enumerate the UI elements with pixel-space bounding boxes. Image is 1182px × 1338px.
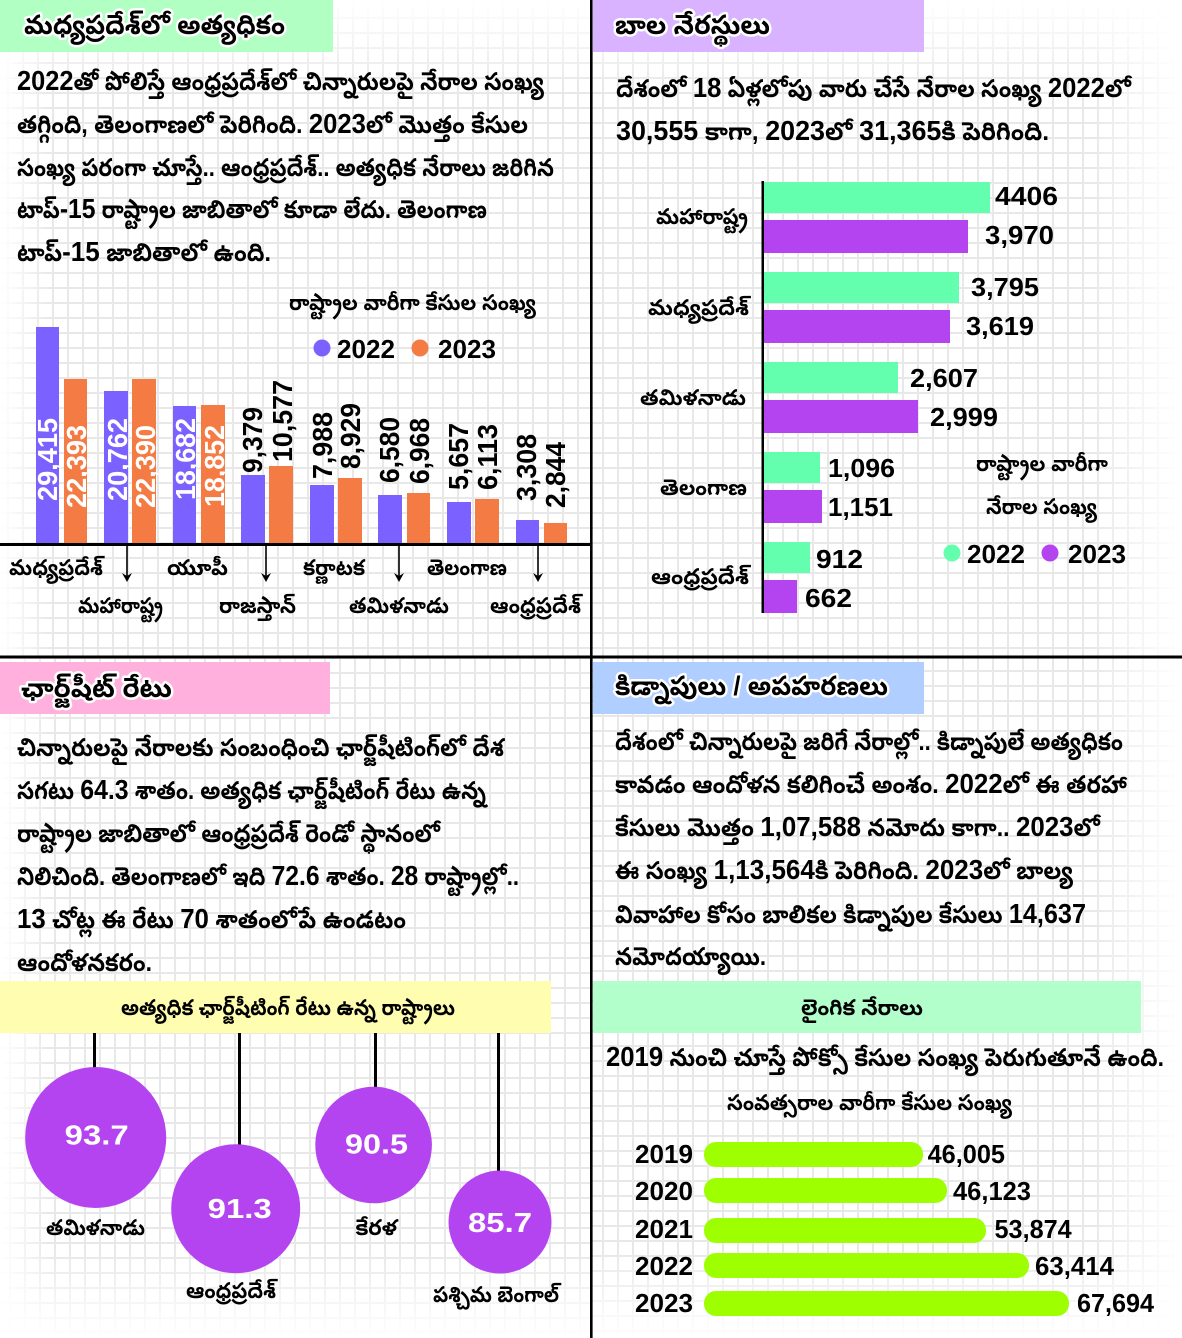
body text: దేశంలో 18 ఏళ్లలోపు వారు చేసే నేరాల సంఖ్య 2022లో: [616, 72, 1132, 108]
group: Tamil Nadu: 2,999: [930, 402, 998, 432]
bar value labels: 22,390: [130, 425, 161, 508]
body text: సగటు 64.3 శాతం. అత్యధిక ఛార్జ్‌షీటింగ్ రేటు ఉన్న: [17, 774, 489, 810]
state labels: యూపీ: [167, 555, 228, 580]
panel: bottom-right kidnappings: [593, 662, 1164, 1318]
legend: 2022 and 2023: 2023: [438, 334, 496, 364]
group: Maharashtra: [656, 181, 1058, 253]
heading band: charge sheet rate: ఛార్జ్‌షీట్ రేటు: [21, 673, 172, 708]
group: Andhra Pradesh: 912: [816, 544, 863, 574]
body text: టాప్-15 జాబితాలో ఉంది.: [17, 236, 271, 267]
row: 2021: 2021: [635, 1214, 693, 1244]
chart note: offences by state: రాష్ట్రాల వారీగా: [976, 451, 1108, 481]
state labels: మహారాష్ట్ర: [78, 593, 163, 623]
circle: Tamil Nadu 93.7: 93.7: [65, 1120, 129, 1150]
group: Telangana: 1,096: [828, 453, 895, 483]
row: 2023: [635, 1288, 1155, 1318]
heading band: juvenile offenders: బాల నేరస్థులు: [615, 10, 770, 47]
bar value labels: 22,393: [61, 425, 92, 508]
row: 2023: 67,694: [1077, 1288, 1155, 1318]
bar value labels: 7,988: [307, 412, 338, 479]
body text: సంఖ్య పరంగా చూస్తే.. ఆంధ్రప్రదేశ్.. అత్యధిక నేరాలు జరిగిన: [17, 154, 554, 187]
row: 2019: [635, 1139, 1005, 1169]
body text: [616, 72, 1132, 146]
bars: 2022: [36, 327, 539, 543]
panel: top-left Madhya Pradesh highest: [0, 0, 590, 623]
bar value labels: 10,577: [267, 380, 298, 462]
panel: bottom-left charge sheet rate: [0, 662, 562, 1310]
group: Madhya Pradesh: 3,619: [966, 311, 1034, 341]
chart note: offences by state: [976, 451, 1108, 523]
circle: Andhra Pradesh 91.3: [171, 1144, 300, 1305]
bar value labels: 5,657: [443, 423, 474, 490]
arrows to lower state labels: [122, 546, 543, 582]
bar value labels: 20,762: [102, 418, 133, 501]
body text: కేసులు మొత్తం 1,07,588 నమోదు కాగా.. 2023లో: [615, 811, 1101, 846]
group: Maharashtra: మహారాష్ట్ర: [656, 204, 748, 234]
legend: 2022 and 2023: 2022: [967, 539, 1025, 569]
group: Telangana: 1,151: [828, 492, 893, 522]
heading band: Madhya Pradesh: మధ్యప్రదేశ్‌లో అత్యధికం: [24, 10, 285, 45]
circle: Kerala 90.5: 90.5: [345, 1128, 408, 1160]
body text: రాష్ట్రాల జాబితాలో ఆంధ్రప్రదేశ్ రెండో స్థానంలో: [17, 820, 441, 854]
group: Madhya Pradesh: 3,795: [971, 272, 1039, 302]
group: Madhya Pradesh: [648, 272, 1039, 343]
row: 2022: 63,414: [1035, 1251, 1115, 1281]
sub-heading band: states with highest charge sheet rate: [0, 981, 551, 1033]
heading band: Madhya Pradesh: [0, 0, 333, 52]
row: 2019: 46,005: [928, 1139, 1005, 1169]
body text: నిలిచింది. తెలంగాణలో ఇది 72.6 శాతం. 28 రాష్ట్రాల్లో..: [17, 860, 519, 897]
body text: టాప్-15 రాష్ట్రాల జాబితాలో కూడా లేదు. తెలంగాణ: [17, 193, 487, 230]
chart title: cases by state: రాష్ట్రాల వారీగా కేసుల సంఖ్య: [289, 290, 537, 320]
legend: 2022 and 2023: 2023: [1068, 539, 1126, 569]
bar value labels: 3,308: [511, 434, 542, 501]
group: Maharashtra: 4406: [995, 181, 1058, 211]
row: 2020: 46,123: [953, 1176, 1031, 1206]
group: Tamil Nadu: [640, 362, 998, 433]
circle: Tamil Nadu 93.7: [25, 1067, 166, 1240]
circle: Kerala 90.5: [315, 1087, 432, 1240]
bar value labels: 6,113: [472, 424, 503, 490]
sub-heading band: sexual offences: లైంగిక నేరాలు: [801, 995, 923, 1023]
row: 2020: 2020: [635, 1176, 693, 1206]
bar chart: cases by state: [0, 327, 590, 623]
legend: 2022 and 2023: [944, 539, 1126, 569]
bar value labels: 9,379: [237, 407, 268, 473]
body text: 30,555 కాగా, 2023లో 31,365కి పెరిగింది.: [616, 115, 1049, 146]
bar value labels: 8,929: [335, 403, 366, 469]
circle: West Bengal 85.7: [433, 1170, 562, 1310]
row: 2022: [635, 1251, 1115, 1281]
row: 2022: 2022: [635, 1251, 693, 1281]
bar value labels: 18,852: [199, 425, 230, 507]
circle: Andhra Pradesh 91.3: 91.3: [208, 1193, 272, 1224]
body text: వివాహాల కోసం బాలికల కిడ్నాపుల కేసులు 14,637: [615, 898, 1086, 932]
group: Andhra Pradesh: 662: [805, 583, 852, 613]
bar value labels: 6,968: [404, 418, 435, 484]
bar value labels: 2,844: [540, 442, 571, 508]
group: Andhra Pradesh: [651, 542, 863, 613]
body text: కావడం ఆందోళన కలిగించే అంశం. 2022లో ఈ తరహా: [615, 768, 1128, 799]
state labels: ఆంధ్రప్రదేశ్: [490, 593, 583, 620]
group: Maharashtra: 3,970: [985, 220, 1054, 250]
body text: ఈ సంఖ్య 1,13,564కి పెరిగింది. 2023లో బాల్య: [615, 854, 1073, 890]
group: Andhra Pradesh: ఆంధ్రప్రదేశ్: [651, 564, 751, 591]
bar value labels: 29,415: [32, 418, 63, 501]
state labels: రాజస్తాన్: [219, 593, 296, 621]
body text: నమోదయ్యాయి.: [615, 943, 766, 976]
body text: 13 చోట్ల ఈ రేటు 70 శాతంలోపే ఉండటం: [17, 903, 406, 938]
rounded bar chart: POCSO cases by year: [635, 1139, 1155, 1318]
hanging lines from band to circles: [93, 1033, 500, 1171]
bar value labels: 6,580: [374, 417, 405, 483]
heading band: juvenile offenders: [593, 0, 924, 52]
group: Madhya Pradesh: మధ్యప్రదేశ్: [648, 295, 751, 324]
legend: 2022 and 2023: [314, 334, 496, 364]
panel: top-right juvenile offenders: [593, 0, 1132, 613]
body text: 2022తో పోలిస్తే ఆంధ్రప్రదేశ్‌లో చిన్నారులపై నేరాల సంఖ్య: [17, 65, 544, 101]
sub-heading band: sexual offences: [593, 981, 1141, 1033]
row: 2019: 2019: [635, 1139, 693, 1169]
circle: Andhra Pradesh 91.3: ఆంధ్రప్రదేశ్: [186, 1278, 278, 1305]
state labels: కర్ణాటక: [303, 555, 366, 584]
legend: 2022 and 2023: 2022: [337, 334, 395, 364]
heading band: charge sheet rate: [0, 662, 330, 714]
body text: [17, 734, 519, 977]
row: 2021: 53,874: [994, 1214, 1072, 1244]
heading band: kidnappings and abductions: [593, 662, 924, 714]
sub-heading band: states with highest charge sheet rate: అత్యధిక ఛార్జ్‌షీటింగ్ రేటు ఉన్న రాష్ట్రాలు: [121, 995, 455, 1025]
bars: 2023: [64, 379, 567, 543]
heading band: kidnappings and abductions: కిడ్నాపులు / అపహరణలు: [615, 671, 888, 705]
horizontal bar chart: offences by state: [640, 181, 1058, 613]
group: Telangana: తెలంగాణ: [660, 475, 747, 500]
body text: దేశంలో చిన్నారులపై జరిగే నేరాల్లో.. కిడ్నాపులే అత్యధికం: [615, 728, 1123, 761]
state labels: తమిళనాడు: [349, 593, 449, 618]
bar value labels: 18,682: [170, 418, 201, 500]
axis line: [0, 543, 590, 546]
body text: ఆందోళనకరం.: [17, 949, 152, 977]
bar value labels: [32, 380, 571, 508]
body text: [17, 65, 554, 267]
chart title: cases by year: సంవత్సరాల వారీగా కేసుల సంఖ్య: [727, 1090, 1013, 1119]
group: Tamil Nadu: 2,607: [910, 363, 978, 393]
state labels: తెలంగాణ: [427, 555, 507, 580]
row: 2023: 2023: [635, 1288, 693, 1318]
group: Tamil Nadu: తమిళనాడు: [640, 385, 746, 410]
row: 2020: [635, 1176, 1031, 1206]
state labels: [9, 555, 583, 623]
body text: [615, 728, 1128, 976]
chart note: offences by state: నేరాల సంఖ్య: [986, 494, 1098, 523]
vertical axis: [762, 181, 764, 613]
circle: West Bengal 85.7: పశ్చిమ బెంగాల్: [433, 1282, 562, 1310]
circle: Kerala 90.5: కేరళ: [356, 1215, 399, 1240]
circle: West Bengal 85.7: 85.7: [468, 1207, 532, 1238]
state labels: మధ్యప్రదేశ్: [9, 555, 105, 584]
row: 2021: [635, 1214, 1072, 1244]
body text: చిన్నారులపై నేరాలకు సంబంధించి ఛార్జ్‌షీటింగ్‌లో దేశ: [17, 734, 505, 767]
body text: తగ్గింది, తెలంగాణలో పెరిగింది. 2023లో మొత్తం కేసుల: [17, 108, 528, 144]
circle: Tamil Nadu 93.7: తమిళనాడు: [46, 1215, 145, 1240]
group: Telangana: [660, 452, 895, 523]
